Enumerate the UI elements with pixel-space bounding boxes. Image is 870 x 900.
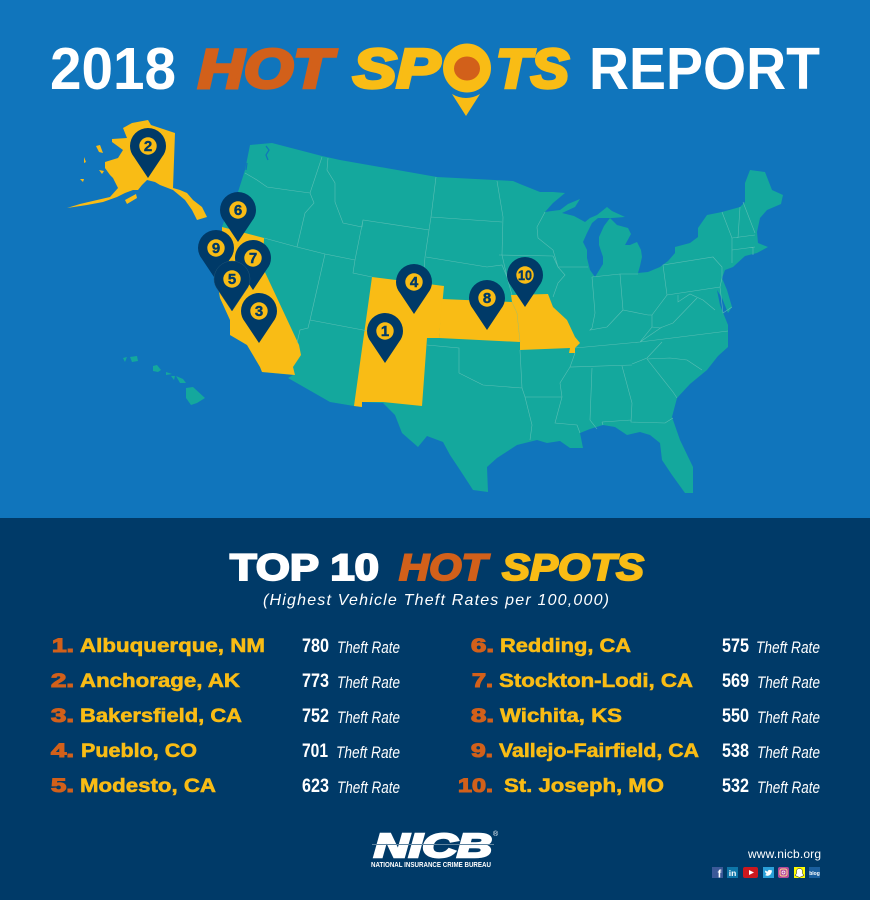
row 10: Theft Rate [757, 779, 820, 797]
pin 7 Stockton-Lodi [235, 240, 271, 290]
icon: linkedin: in [729, 868, 736, 878]
row 8: Wichita, KS [500, 706, 622, 727]
map of the United States [67, 120, 783, 493]
row 4: 701 [302, 741, 328, 762]
row 10: 10. [458, 776, 493, 797]
icon: instagram [778, 867, 789, 878]
Colorado and New Mexico highlighted [354, 277, 444, 407]
row 7: Theft Rate [757, 674, 820, 692]
row 5: Theft Rate [337, 779, 400, 797]
row 7: Stockton-Lodi, CA [499, 671, 693, 692]
pin 10 St. Joseph [507, 257, 543, 307]
row 10 [458, 776, 820, 797]
pin 4 Pueblo: 4 [410, 274, 419, 291]
row 2: Anchorage, AK [80, 671, 240, 692]
icon: youtube [743, 867, 758, 878]
map pins [130, 128, 543, 363]
subtitle: (Highest Vehicle Theft Rates per 100,000) [263, 592, 609, 609]
section heading [230, 547, 644, 588]
row 3: 752 [302, 706, 329, 727]
pin 2 Anchorage: 2 [144, 138, 152, 155]
row 8: Theft Rate [757, 709, 820, 727]
row 4: Theft Rate [336, 744, 400, 762]
pin 3 Bakersfield [241, 293, 277, 343]
pin 8 Wichita [469, 280, 505, 330]
row 8: 8. [471, 706, 494, 727]
row 5 [51, 776, 400, 797]
pin 1 Albuquerque [367, 313, 403, 363]
row 4 [51, 741, 400, 762]
heading: TOP 10: TOP 10 [230, 547, 379, 588]
pin 9 Vallejo-Fairfield: 9 [212, 240, 220, 257]
row 2: 2. [51, 671, 74, 692]
logo wordmark: NICB [374, 827, 492, 864]
title: HOT: HOT [198, 38, 337, 100]
pin 2 Anchorage [130, 128, 166, 178]
pin 7 Stockton-Lodi: 7 [249, 250, 257, 267]
row 5: 623 [302, 776, 329, 797]
row 1: Albuquerque, NM [80, 636, 265, 657]
pin 9 Vallejo-Fairfield [198, 230, 234, 280]
title [50, 36, 820, 116]
contiguous states landmass [216, 143, 783, 493]
lighter lines along yellow state edges [512, 302, 520, 342]
pin 10 St. Joseph: 10 [518, 267, 532, 283]
title: REPORT: REPORT [589, 36, 820, 102]
row 1: Theft Rate [337, 639, 400, 657]
row 7 [472, 671, 820, 692]
row 7: 569 [722, 671, 749, 692]
pin 1 Albuquerque: 1 [381, 323, 389, 340]
Puget Sound water [246, 146, 269, 170]
row 5: 5. [51, 776, 74, 797]
row 8 [471, 706, 820, 727]
icon: snapchat [794, 867, 805, 878]
Alaska highlighted [67, 120, 207, 220]
pin 6 Redding: 6 [234, 202, 242, 219]
Missouri highlighted [511, 294, 580, 353]
row 9: 538 [722, 741, 749, 762]
ranking list right column [458, 636, 820, 797]
heading: HOT: HOT [399, 547, 491, 588]
row 9: Vallejo-Fairfield, CA [499, 741, 699, 762]
pin 8 Wichita: 8 [483, 290, 491, 307]
icon: facebook: f [718, 868, 722, 880]
title: TS: TS [496, 38, 569, 100]
pin 5 Modesto: 5 [228, 271, 236, 288]
row 3: 3. [51, 706, 74, 727]
NICB logo [371, 827, 499, 869]
registered mark: ® [493, 830, 499, 838]
pin 3 Bakersfield: 3 [255, 303, 263, 320]
Kansas highlighted [439, 299, 520, 342]
row 2: Theft Rate [337, 674, 400, 692]
row 6: Theft Rate [756, 639, 820, 657]
row 7: 7. [472, 671, 493, 692]
row 9: Theft Rate [757, 744, 820, 762]
logo tagline: NATIONAL INSURANCE CRIME BUREAU [371, 860, 491, 869]
ranking list left column [51, 636, 400, 797]
title: O behind pin: O [448, 37, 486, 99]
Hawaii islands [123, 356, 205, 405]
row 9 [471, 741, 820, 762]
bottom navy background panel [0, 518, 870, 900]
row 6: 6. [471, 636, 494, 657]
row 1 [52, 636, 400, 657]
row 5: Modesto, CA [80, 776, 216, 797]
row 1: 780 [302, 636, 329, 657]
state border lines [245, 157, 755, 440]
title: 2018: 2018 [50, 36, 176, 102]
icon: blog: blog [809, 871, 820, 877]
row 6: 575 [722, 636, 749, 657]
row 2: 773 [302, 671, 329, 692]
row 4: Pueblo, CO [81, 741, 197, 762]
title: pin-shaped O [443, 44, 491, 116]
row 3 [51, 706, 400, 727]
row 10: St. Joseph, MO [504, 776, 664, 797]
pin 5 Modesto [214, 261, 250, 311]
pin 4 Pueblo [396, 264, 432, 314]
California highlighted [216, 227, 301, 375]
heading: SPOTS: SPOTS [502, 547, 644, 588]
row 6: Redding, CA [500, 636, 631, 657]
row 8: 550 [722, 706, 749, 727]
icon: twitter [763, 867, 774, 878]
row 9: 9. [471, 741, 493, 762]
social media icons [712, 867, 820, 880]
website url: www.nicb.org [747, 847, 821, 861]
row 4: 4. [51, 741, 74, 762]
top blue background panel [0, 0, 870, 518]
row 3: Theft Rate [337, 709, 400, 727]
row 1: 1. [52, 636, 74, 657]
pin 6 Redding [220, 192, 256, 242]
row 2 [51, 671, 400, 692]
row 3: Bakersfield, CA [80, 706, 242, 727]
row 6 [471, 636, 820, 657]
title: SP: SP [353, 38, 440, 100]
row 10: 532 [722, 776, 749, 797]
